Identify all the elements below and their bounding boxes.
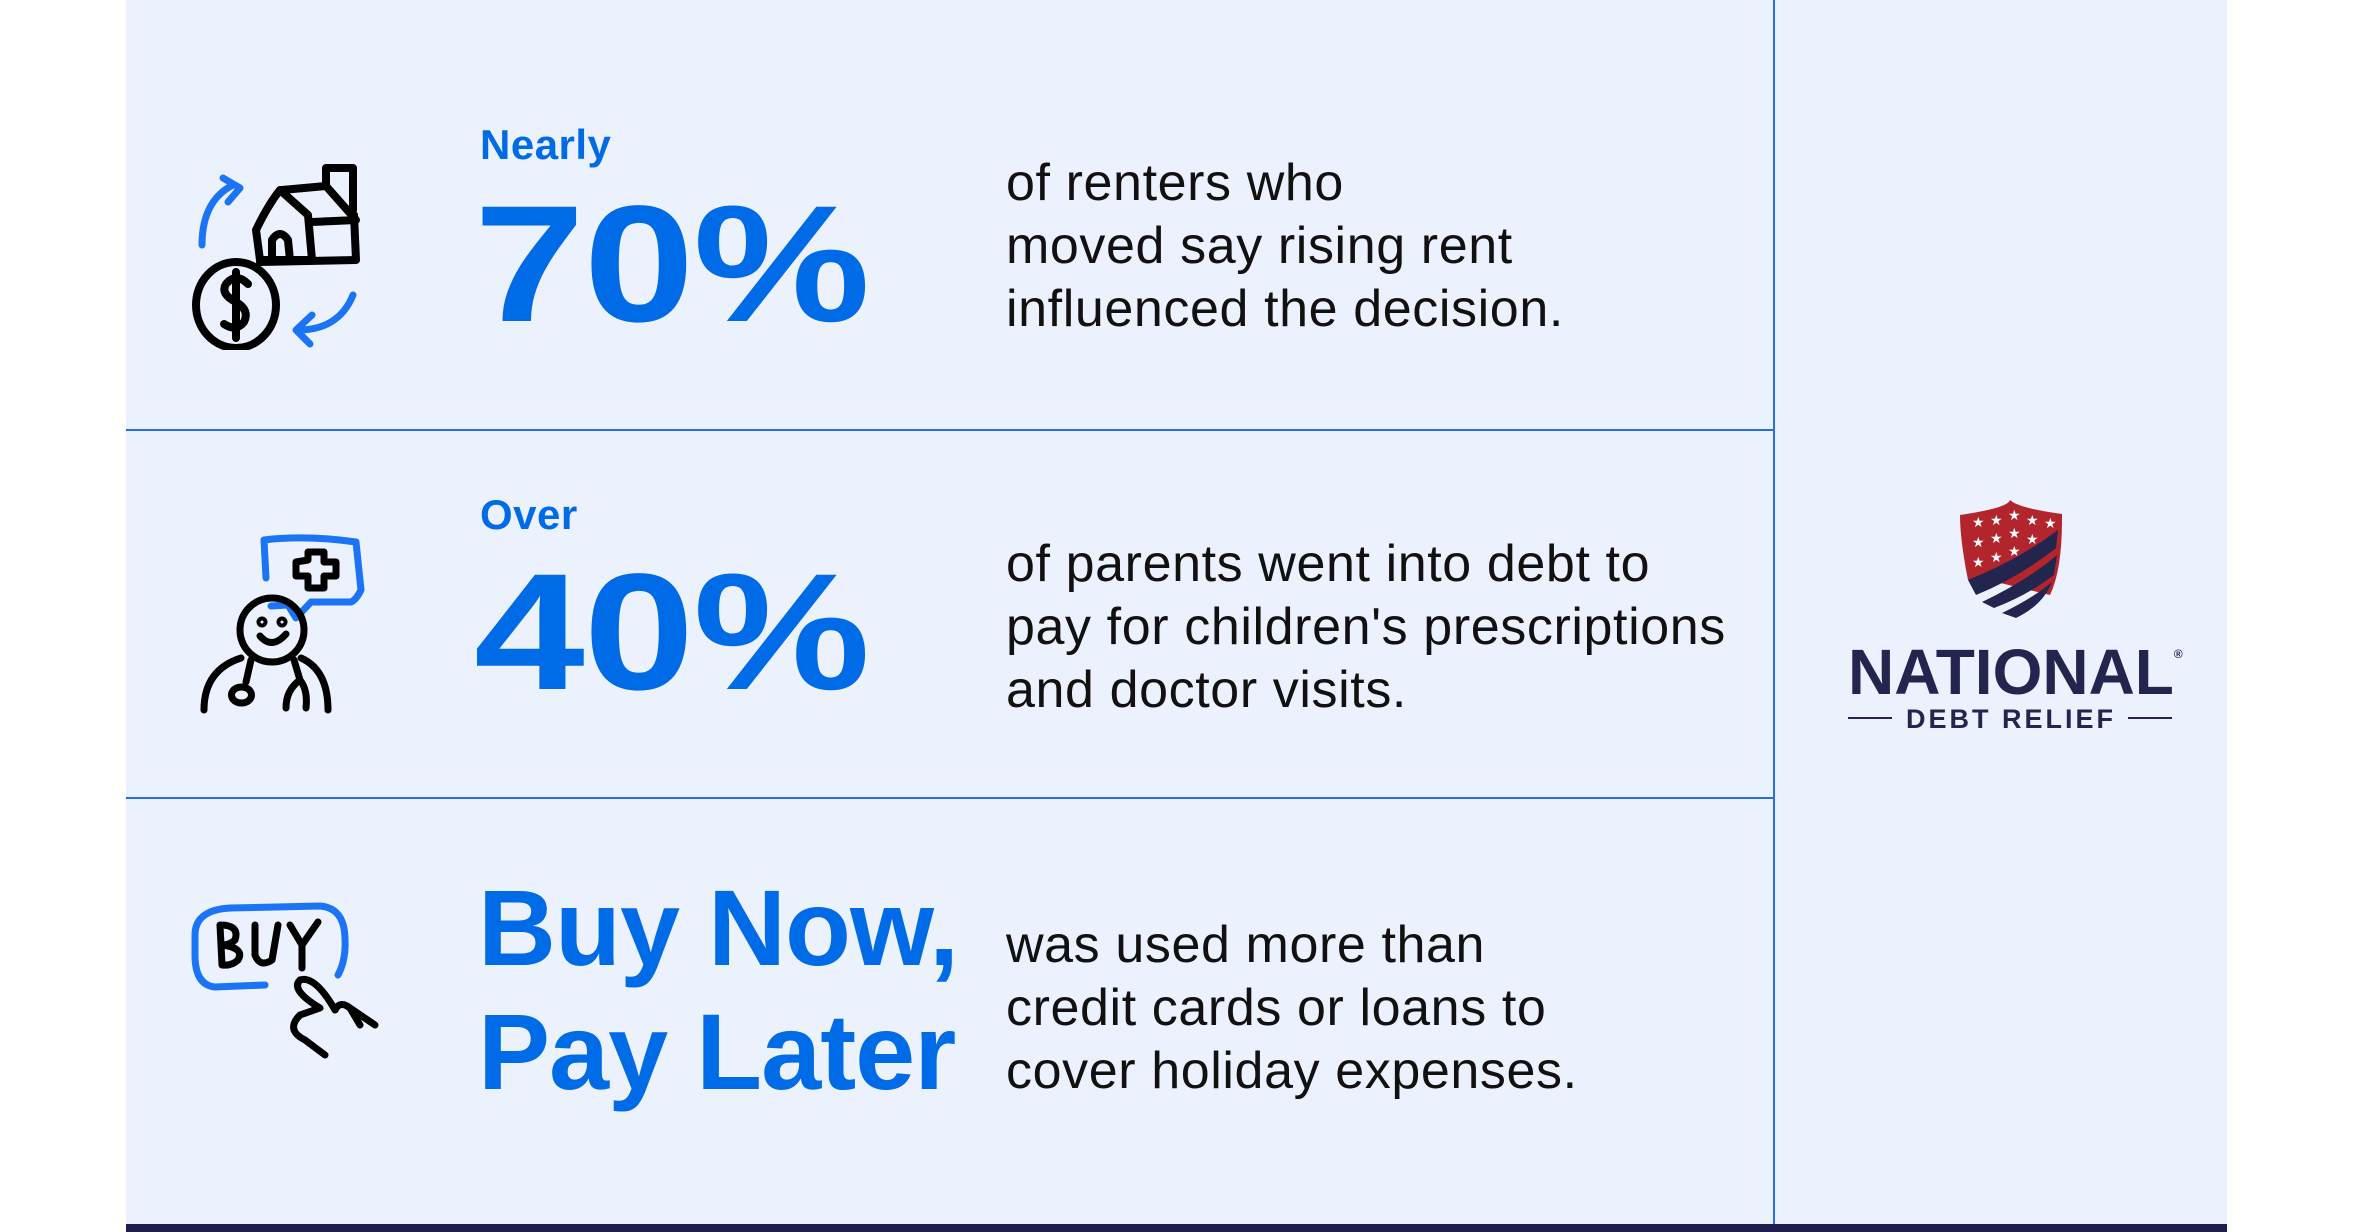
text: stat 2 description xyxy=(1006,535,1726,719)
text: NATIONAL: NATIONAL® xyxy=(1848,636,2183,708)
icon: shield: ★ xyxy=(1972,515,1985,531)
icon: shield: ★ xyxy=(2044,516,2057,532)
text: stat 2 description: and doctor visits. xyxy=(1006,661,1407,719)
icon: shield: ★ xyxy=(2026,532,2039,548)
icon: shield: ★ xyxy=(1972,555,1985,571)
text: stat 3 description: credit cards or loans to xyxy=(1006,979,1546,1037)
icon: shield: ★ xyxy=(1990,531,2003,547)
label: Nearly: Nearly xyxy=(480,121,611,168)
text: stat 3 description xyxy=(1006,916,1578,1100)
text: DEBT RELIEF: DEBT RELIEF xyxy=(1906,704,2116,734)
text: stat 3 description: was used more than xyxy=(1006,916,1485,974)
icon: shield: ★ xyxy=(1990,513,2003,529)
text: stat 2 description: of parents went into debt to xyxy=(1006,535,1650,593)
big number 40%: 40% xyxy=(474,540,869,725)
icon: shield: ★ xyxy=(2026,513,2039,529)
logo: National Debt Relief xyxy=(1848,500,2183,734)
icon: shield: ★ xyxy=(1972,535,1985,551)
bottom bar xyxy=(126,1224,2227,1232)
heading: Buy Now, Pay Later: Pay Later xyxy=(478,991,955,1112)
big number 70%: 70% xyxy=(474,172,869,357)
icon: house and money xyxy=(192,164,360,350)
text: stat 1 description: influenced the decision. xyxy=(1006,280,1564,338)
text: stat 3 description: cover holiday expenses. xyxy=(1006,1042,1578,1100)
icon: shield: ★ xyxy=(1990,550,2003,566)
stat 1 number xyxy=(474,121,869,357)
icon: doctor xyxy=(200,534,364,714)
icon: shield xyxy=(1960,500,2062,618)
label: Over: Over xyxy=(480,491,578,538)
text: stat 1 description xyxy=(1006,154,1564,338)
text: stat 1 description: of renters who xyxy=(1006,154,1344,212)
icon: shield: ★ xyxy=(2008,508,2021,524)
text: stat 1 description: moved say rising rent xyxy=(1006,217,1513,275)
icon: shield: ★ xyxy=(2008,526,2021,542)
heading: Buy Now, Pay Later xyxy=(478,867,958,1112)
stat 2 number xyxy=(474,491,869,725)
text: stat 2 description: pay for children's prescriptions xyxy=(1006,598,1726,656)
icon: buy button with hand xyxy=(192,902,378,1058)
icon: shield: ★ xyxy=(2008,544,2021,560)
heading: Buy Now, Pay Later: Buy Now, xyxy=(478,867,958,988)
